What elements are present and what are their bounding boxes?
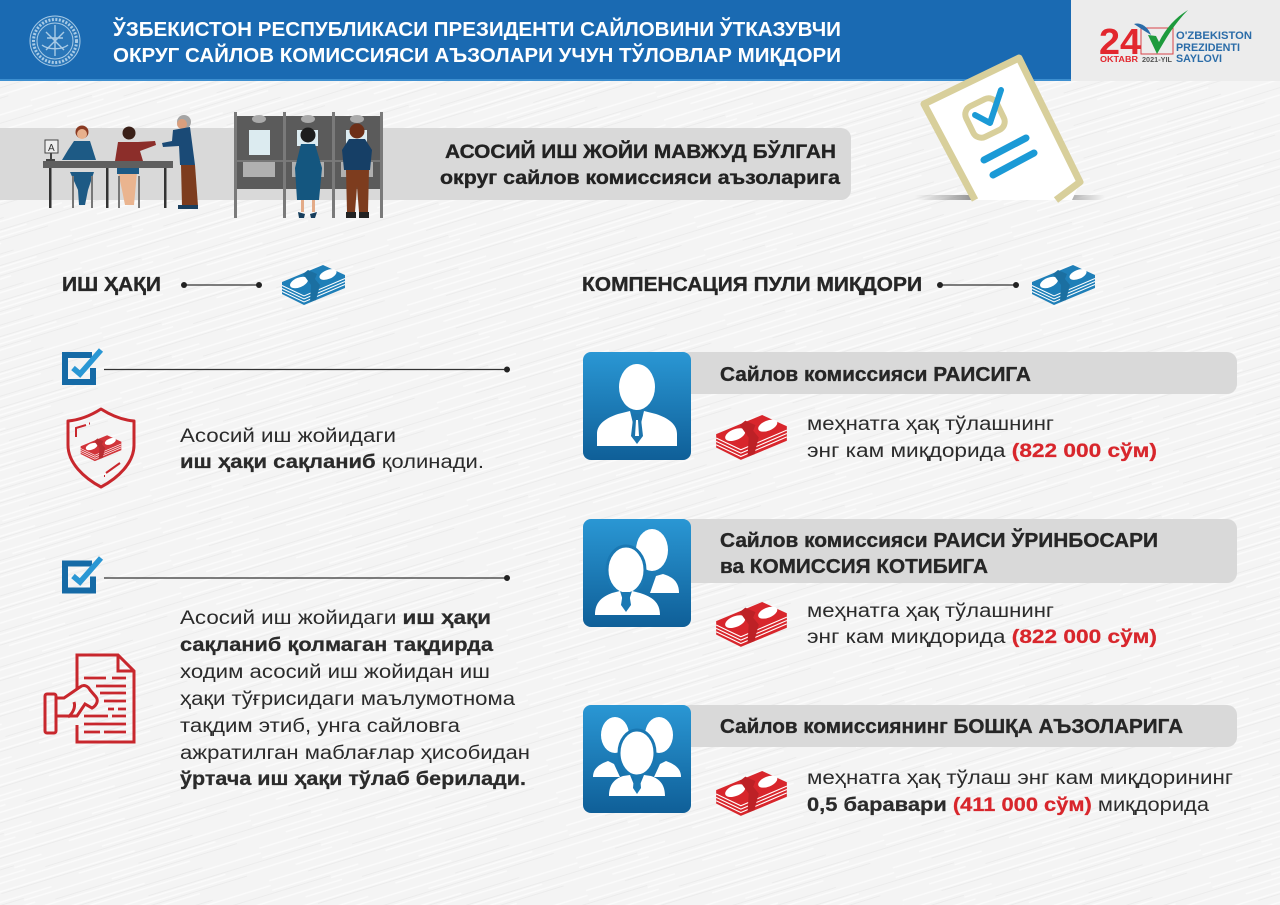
header bar bbox=[0, 0, 1071, 81]
amount text: энг кам миқдорида (822 000 сўм) bbox=[807, 441, 1157, 462]
text block 2: тақдим этиб, унга сайловга bbox=[180, 716, 461, 737]
icon: red money bbox=[716, 602, 787, 647]
text block 2: ҳақи тўғрисидаги маълумотнома bbox=[180, 689, 516, 710]
icon: blue money bbox=[282, 265, 345, 305]
election logo panel: PREZIDENTI bbox=[1176, 42, 1240, 54]
election logo panel: O'ZBEKISTON bbox=[1176, 30, 1252, 42]
amount text: 0,5 баравари (411 000 сўм) миқдорида bbox=[807, 795, 1209, 816]
election logo panel: 2021-YIL bbox=[1142, 55, 1172, 64]
amount text: меҳнатга ҳақ тўлаш энг кам миқдорининг bbox=[807, 768, 1233, 789]
amount text: меҳнатга ҳақ тўлашнинг bbox=[807, 414, 1054, 435]
panel: other members: Сайлов комиссиянинг БОШҚА АЪЗОЛАРИГА bbox=[720, 716, 1183, 738]
illustration: voting booths bbox=[234, 112, 383, 218]
election logo panel: OKTABR bbox=[1100, 55, 1138, 64]
icon: shield with money bbox=[68, 409, 134, 487]
election logo panel: SAYLOVI bbox=[1176, 53, 1222, 65]
text block 2: ажратилган маблағлар ҳисобидан bbox=[180, 743, 530, 764]
icon: document and hand bbox=[45, 655, 134, 742]
amount text bbox=[807, 414, 1157, 462]
header title: ОКРУГ САЙЛОВ КОМИССИЯСИ АЪЗОЛАРИ УЧУН ТЎЛОВЛАР МИҚДОРИ bbox=[113, 43, 841, 67]
ballot paper icon bbox=[915, 58, 1105, 200]
text block 2: ходим асосий иш жойидан иш bbox=[180, 662, 490, 683]
text block 1: иш ҳақи сақланиб қолинади. bbox=[180, 452, 484, 473]
text block 2: сақланиб қолмаган тақдирда bbox=[180, 635, 493, 656]
right column: compensation heading: КОМПЕНСАЦИЯ ПУЛИ МИҚДОРИ bbox=[582, 274, 922, 296]
election logo panel bbox=[1071, 0, 1280, 81]
amount text bbox=[807, 601, 1157, 648]
checkbox with line 2 bbox=[65, 558, 510, 590]
header title: ЎЗБЕКИСТОН РЕСПУБЛИКАСИ ПРЕЗИДЕНТИ САЙЛОВИНИ ЎТКАЗУВЧИ bbox=[112, 17, 841, 41]
grey subtitle band bbox=[0, 128, 851, 200]
subtitle: округ сайлов комиссияси аъзоларига bbox=[440, 168, 840, 189]
amount text bbox=[807, 768, 1233, 816]
panel: deputy chairman and secretary bbox=[583, 519, 1237, 648]
right column: compensation heading bbox=[582, 265, 1095, 305]
illustration: commission table with people: A bbox=[48, 143, 55, 154]
icon: two people bbox=[583, 519, 691, 627]
text block 1 bbox=[180, 426, 484, 473]
subtitle bbox=[440, 141, 840, 189]
panel: chairman bbox=[583, 352, 1237, 462]
icon: red money bbox=[716, 415, 787, 460]
header title bbox=[112, 17, 841, 67]
icon: one person bbox=[583, 352, 691, 460]
panel: chairman: Сайлов комиссияси РАИСИГА bbox=[720, 364, 1031, 386]
illustration: commission table with people bbox=[43, 115, 198, 209]
panel: deputy chairman and secretary: ва КОМИССИЯ КОТИБИГА bbox=[720, 556, 988, 578]
text block 2 bbox=[180, 608, 530, 790]
subtitle: АСОСИЙ ИШ ЖОЙИ МАВЖУД БЎЛГАН bbox=[445, 141, 836, 163]
panel: deputy chairman and secretary: Сайлов комиссияси РАИСИ ЎРИНБОСАРИ bbox=[720, 528, 1158, 552]
amount text: энг кам миқдорида (822 000 сўм) bbox=[807, 627, 1157, 648]
text block 2: Асосий иш жойидаги иш ҳақи bbox=[180, 608, 491, 629]
left column: salary heading: ИШ ҲАҚИ bbox=[62, 274, 161, 296]
icon: blue money bbox=[1032, 265, 1095, 305]
left column: salary heading bbox=[62, 265, 345, 305]
icon: group of people bbox=[583, 705, 691, 813]
checkbox with line 1 bbox=[65, 350, 510, 382]
emblem logo bbox=[30, 16, 80, 66]
panel: other members bbox=[583, 705, 1237, 816]
text block 1: Асосий иш жойидаги bbox=[180, 426, 396, 447]
icon: red money bbox=[716, 771, 787, 816]
election logo panel: 24 bbox=[1099, 21, 1141, 62]
text block 2: ўртача иш ҳақи тўлаб берилади. bbox=[180, 769, 526, 790]
amount text: меҳнатга ҳақ тўлашнинг bbox=[807, 601, 1054, 622]
